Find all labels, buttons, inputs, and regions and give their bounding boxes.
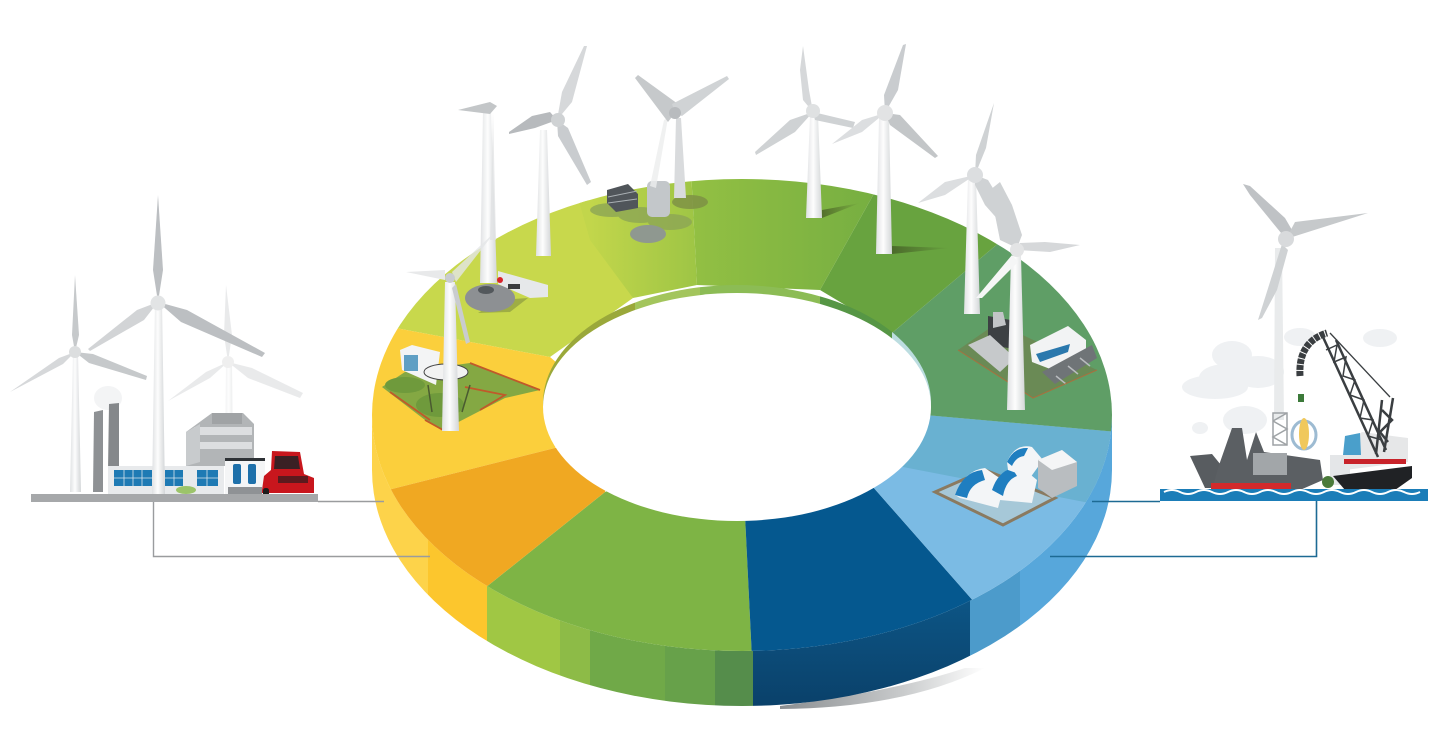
- segment: green: [488, 491, 752, 651]
- segment: light blue: [874, 416, 1111, 600]
- turbine: top centre: [755, 46, 860, 218]
- water platform: [1160, 489, 1428, 501]
- offshore turbine: [1243, 184, 1368, 445]
- turbine: right front: [976, 182, 1080, 410]
- factory hall with blue windows: [108, 466, 224, 494]
- segment: light blue upper band: [902, 416, 1111, 502]
- globe logo: [1292, 418, 1316, 450]
- smoke: [94, 386, 122, 410]
- ring top face: [372, 179, 1112, 651]
- segment: mid green: [692, 179, 874, 290]
- inner rim and hole: [543, 285, 931, 521]
- mini facility: yellow segment: [382, 345, 540, 430]
- turbine: back third: [635, 75, 729, 198]
- segment: dark green: [820, 194, 998, 332]
- segment: lime green: [580, 181, 697, 298]
- connector lines left: [154, 500, 430, 556]
- segment: orange: [390, 448, 606, 586]
- right scene: offshore installation: [1160, 184, 1428, 501]
- turbine: small left: [10, 275, 147, 492]
- turbine: right upper: [918, 103, 1020, 314]
- turbine: left foreground: [406, 232, 495, 431]
- white block: [225, 458, 265, 494]
- turbine: top centre right: [832, 44, 950, 254]
- turbine: faint rear: [168, 285, 303, 465]
- red truck: [262, 451, 314, 498]
- ground shadow under ring: [780, 668, 985, 709]
- ground slab: [31, 494, 318, 502]
- smokestacks: [93, 403, 119, 492]
- crawler crane: [1298, 333, 1412, 490]
- turbine: large: [88, 195, 265, 494]
- turbine: back left tall: [458, 102, 497, 283]
- segment: teal green: [892, 244, 1112, 432]
- segment: yellow: [372, 328, 556, 490]
- ring side wall: [372, 418, 1112, 706]
- ship: [1190, 428, 1350, 490]
- mini facility: domes on light blue segment: [935, 446, 1077, 525]
- power building: [186, 413, 254, 466]
- mini facility: car and hub on yellow-green: [465, 271, 548, 313]
- segment: dark blue: [745, 488, 972, 651]
- connector lines right: [1050, 501, 1316, 556]
- left scene: industry and wind farm: [10, 195, 318, 502]
- mini facility: works on teal segment: [958, 312, 1097, 398]
- mini facility: tank and block on lime: [590, 181, 708, 243]
- clouds: [1182, 328, 1397, 434]
- turbine: back second: [509, 46, 591, 256]
- segment: yellow green: [398, 200, 633, 357]
